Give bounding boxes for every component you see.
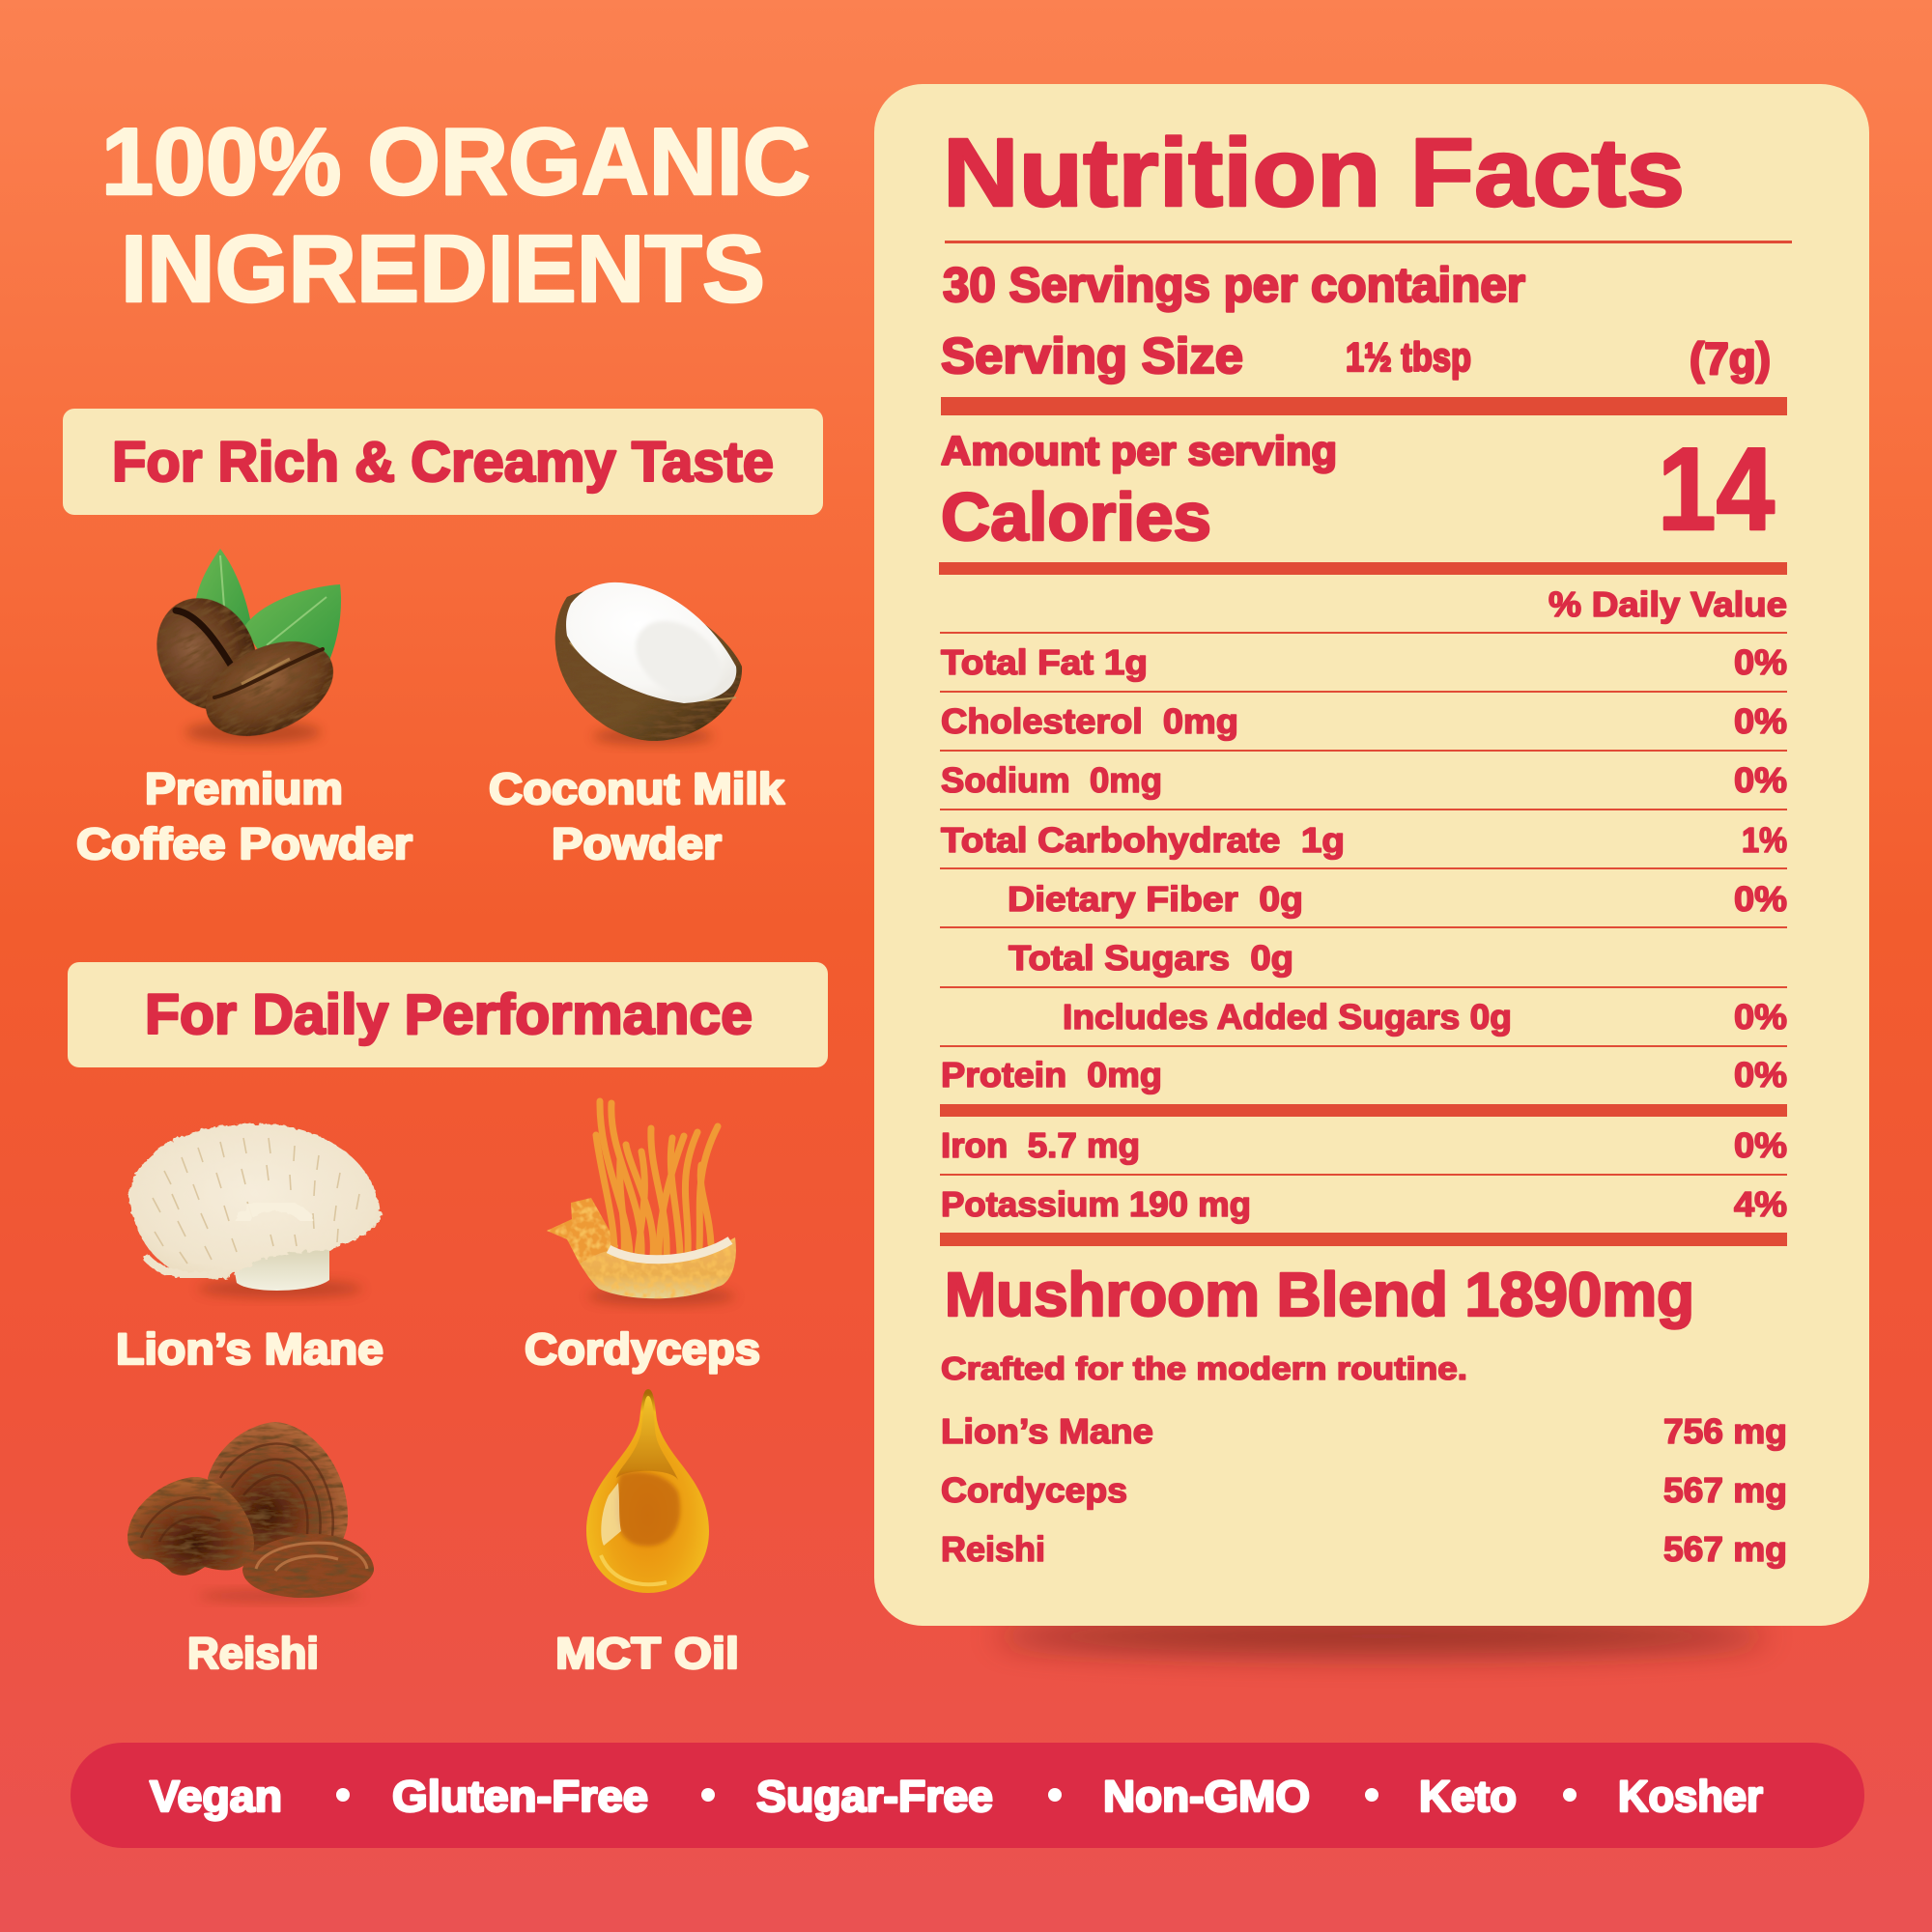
serving size — [941, 328, 1771, 384]
nutrient rows: 0% — [1734, 879, 1787, 919]
nutrient rows: 0% — [1734, 642, 1787, 682]
nutrient rows: Iron 5.7 mg — [941, 1125, 1140, 1165]
mushroom rows: Lion’s Mane — [941, 1411, 1153, 1451]
nutrient rows: Total Fat 1g — [941, 642, 1148, 682]
label: coconut: Powder — [552, 819, 722, 868]
icon: reishi — [128, 1422, 374, 1602]
icon: lion's mane — [129, 1123, 381, 1297]
nutrient rows: 0% — [1734, 1125, 1787, 1165]
section: for rich and creamy taste: For Rich & Creamy Taste — [112, 431, 774, 494]
calories block: 14 — [1658, 423, 1775, 554]
serving size: Serving Size — [941, 328, 1243, 384]
servings per container: 30 Servings per container — [943, 258, 1525, 312]
label: coconut: Coconut Milk — [489, 764, 785, 813]
label: lion's mane: Lion’s Mane — [116, 1324, 384, 1374]
section: for daily performance: For Daily Performance — [145, 983, 753, 1046]
panel: nutrition facts — [874, 84, 1869, 1626]
serving size: 1½ tbsp — [1346, 334, 1471, 380]
section: for daily performance — [68, 962, 828, 1067]
nutrient rows: 1% — [1742, 820, 1787, 860]
bottom badge bar: Non-GMO — [1103, 1772, 1310, 1821]
label: coffee: Premium — [145, 764, 343, 813]
nutrient rows: Dietary Fiber 0g — [1008, 879, 1303, 919]
nutrient rows: 4% — [1734, 1184, 1787, 1224]
nutrient rows: Sodium 0mg — [941, 760, 1162, 800]
mushroom blend heading: Mushroom Blend 1890mg — [945, 1260, 1694, 1329]
title: 100% ORGANIC — [101, 108, 810, 214]
icon: oil drop — [586, 1389, 709, 1593]
mushroom rows: 567 mg — [1663, 1470, 1787, 1510]
calories block — [941, 423, 1775, 554]
nutrient rows: Cholesterol 0mg — [941, 701, 1238, 741]
label: coffee: Coffee Powder — [76, 819, 412, 868]
icon: coconut — [555, 582, 742, 745]
nutrient rows: Total Carbohydrate 1g — [941, 820, 1345, 860]
calories block: Calories — [941, 479, 1211, 554]
panel shadow — [995, 1619, 1768, 1654]
nutrient rows: Total Sugars 0g — [1009, 938, 1293, 978]
label: reishi: Reishi — [187, 1629, 319, 1678]
nutrient rows: Includes Added Sugars 0g — [1063, 997, 1512, 1037]
heading: nutrition facts: Nutrition Facts — [943, 119, 1685, 227]
mushroom rows: Reishi — [941, 1529, 1045, 1569]
label: coconut — [489, 764, 785, 868]
nutrient rows: 0% — [1734, 1055, 1787, 1094]
bottom badge bar: Sugar-Free — [756, 1772, 993, 1821]
bottom badge bar: Keto — [1419, 1772, 1517, 1821]
serving size: (7g) — [1690, 333, 1771, 384]
daily value header: % Daily Value — [1548, 584, 1787, 624]
calories block: Amount per serving — [941, 428, 1337, 473]
label: cordyceps: Cordyceps — [525, 1324, 760, 1374]
tagline: Crafted for the modern routine. — [941, 1350, 1467, 1386]
icon: coffee beans — [138, 549, 349, 755]
bottom badge bar: Kosher — [1618, 1772, 1763, 1821]
title: INGREDIENTS — [121, 215, 765, 322]
label: MCT oil: MCT Oil — [555, 1629, 739, 1678]
mushroom rows: Cordyceps — [941, 1470, 1127, 1510]
mushroom rows: 567 mg — [1663, 1529, 1787, 1569]
mushroom rows: 756 mg — [1663, 1411, 1787, 1451]
bottom badge bar: Vegan — [150, 1772, 282, 1821]
title — [101, 108, 810, 322]
bottom badge bar: Gluten-Free — [392, 1772, 648, 1821]
nutrient rows — [941, 642, 1787, 1224]
icon: cordyceps — [547, 1101, 736, 1305]
nutrient rows: Potassium 190 mg — [941, 1184, 1251, 1224]
nutrient rows: Protein 0mg — [941, 1055, 1162, 1094]
section: for rich and creamy taste — [63, 409, 823, 515]
mushroom rows — [941, 1411, 1787, 1569]
bottom badge bar — [71, 1743, 1864, 1848]
label: coffee — [76, 764, 412, 868]
nutrient rows: 0% — [1734, 701, 1787, 741]
nutrient rows: 0% — [1734, 997, 1787, 1037]
nutrient rows: 0% — [1734, 760, 1787, 800]
